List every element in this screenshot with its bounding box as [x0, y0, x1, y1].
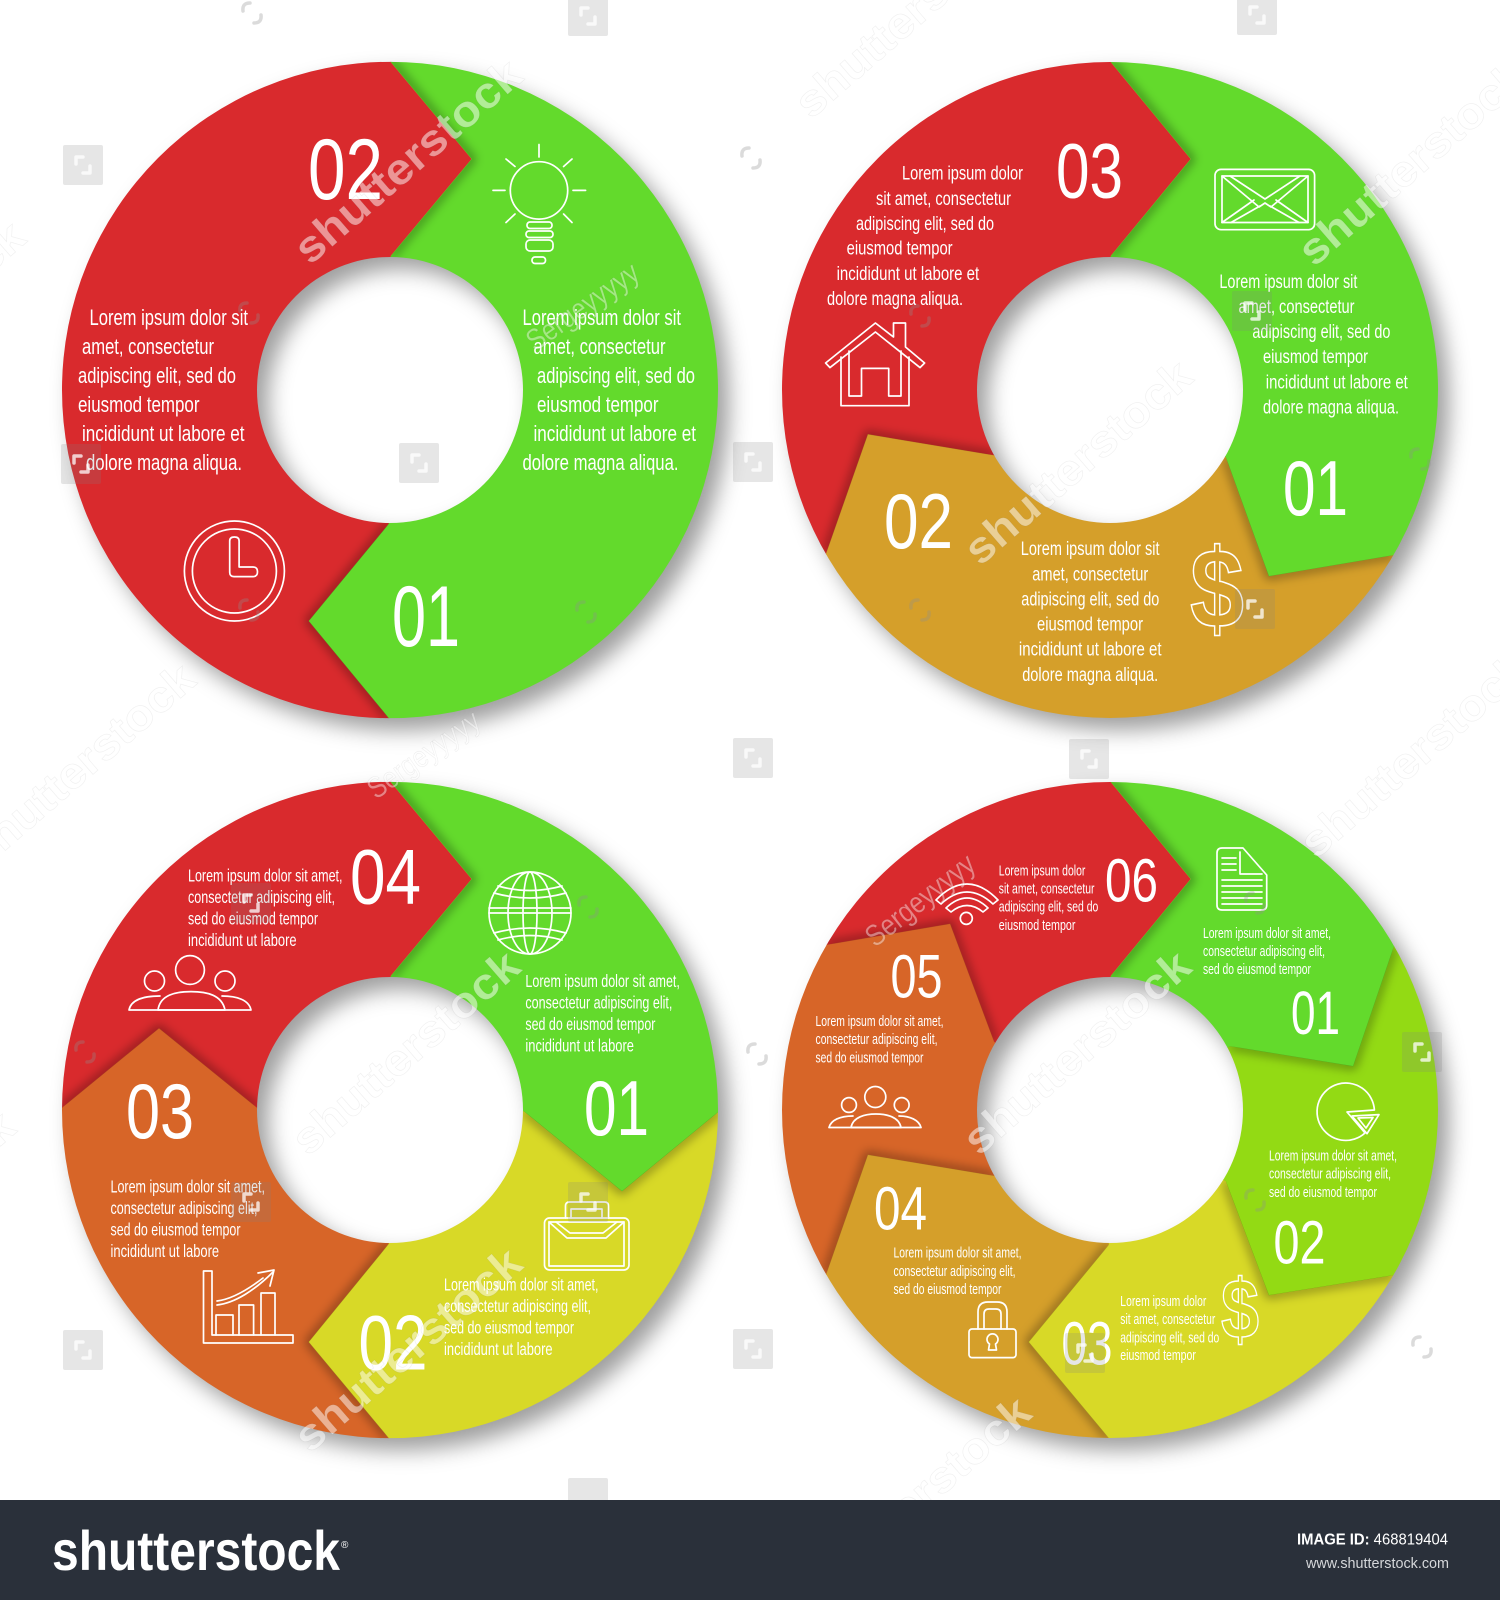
arrow shadow: yellow onto ochre: [1029, 1245, 1109, 1438]
footer logo: shutterstock: shutterstock: [52, 1519, 341, 1582]
donut ring segments: [62, 782, 718, 1438]
panel: four-step donut: [20, 760, 760, 1460]
text block: red: amet, consectetur: [82, 334, 214, 359]
text block: orange: [110, 1177, 265, 1261]
text block: green: eiusmod tempor: [1263, 347, 1369, 368]
text block: green: dolore magna aliqua.: [522, 450, 678, 475]
text block: ochre: Lorem ipsum dolor sit amet,: [894, 1246, 1022, 1262]
text block: ochre: eiusmod tempor: [1037, 615, 1144, 636]
watermark text: shutterstock: shutterstock: [953, 940, 1201, 1165]
text block: ochre: sed do eiusmod tempor: [894, 1282, 1002, 1298]
icon: envelope: [1215, 169, 1315, 230]
text block: ochre: adipiscing elit, sed do: [1021, 589, 1159, 610]
icon: pie chart: [1317, 1083, 1379, 1140]
text block: red: eiusmod tempor: [847, 238, 953, 260]
segment 06 red: [826, 782, 1190, 1043]
watermark square glyphs: [74, 7, 1429, 1361]
text block: red: sit amet, consectetur: [876, 189, 1012, 210]
text block: red: Lorem ipsum dolor sit amet,: [188, 866, 342, 886]
watermark text: shutterstock: shutterstock: [284, 49, 532, 274]
text block: ochre: [894, 1246, 1022, 1298]
text block: yellow: sed do eiusmod tempor: [444, 1318, 574, 1338]
text block: green: adipiscing elit, sed do: [1252, 322, 1390, 343]
number 01: 01: [392, 569, 460, 665]
text block: green: [1203, 926, 1331, 978]
donut ring segments: [782, 782, 1438, 1438]
segment 02 red: [62, 62, 472, 718]
arrow shadow: ochre onto orange: [826, 1155, 994, 1274]
icon: padlock: [969, 1302, 1016, 1358]
text block: yellow: [1120, 1294, 1219, 1364]
donut drop shadow: [73, 74, 729, 730]
arrow shadow: green onto red: [309, 524, 389, 718]
watermark glyph marks: [76, 3, 1431, 1357]
icon: team of three people: [129, 956, 251, 1010]
arrow shadow: red onto green: [391, 782, 472, 976]
donut ring segments: [782, 62, 1438, 718]
number 02: 02: [1274, 1208, 1326, 1276]
segment 01 green: [390, 782, 718, 1192]
segment 02 yellow: [308, 1111, 718, 1438]
text block: lime: consectetur adipiscing elit,: [1269, 1167, 1391, 1183]
text block: green: Lorem ipsum dolor sit amet,: [525, 971, 680, 991]
donut drop shadow: [793, 74, 1449, 730]
arrow shadow: green onto lime: [1230, 947, 1394, 1066]
icon: dollar sign: $: [1190, 526, 1244, 651]
text block: red: eiusmod tempor: [999, 918, 1076, 934]
text block: red: incididunt ut labore et: [837, 264, 980, 285]
text block: ochre: consectetur adipiscing elit,: [894, 1264, 1016, 1280]
text block: green: eiusmod tempor: [537, 392, 658, 417]
icon: document: [1217, 848, 1267, 910]
text block: orange: consectetur adipiscing elit,: [816, 1032, 938, 1048]
text block: red: eiusmod tempor: [78, 392, 200, 417]
panel: six-step donut: [760, 760, 1480, 1470]
text block: red: [999, 863, 1098, 934]
segment 02 ochre: [826, 434, 1394, 718]
text block: orange: Lorem ipsum dolor sit amet,: [816, 1014, 944, 1030]
text block: red: [78, 305, 248, 475]
text block: red: consectetur adipiscing elit,: [188, 887, 335, 907]
text block: green: Lorem ipsum dolor sit: [522, 305, 681, 330]
arrow shadow: green onto ochre: [1226, 457, 1394, 576]
text block: red: incididunt ut labore et: [82, 421, 244, 446]
segment 04 red: [62, 782, 472, 1108]
text block: orange: [816, 1014, 944, 1066]
text block: green: consectetur adipiscing elit,: [525, 992, 672, 1012]
text block: green: sed do eiusmod tempor: [525, 1014, 656, 1034]
arrow shadow: red onto green: [1111, 782, 1191, 976]
number 01: 01: [1283, 444, 1348, 532]
arrow shadow: ochre onto red: [826, 434, 994, 553]
footer registered mark: ®: [341, 1540, 349, 1551]
panel: two-step donut: [40, 40, 740, 740]
segment 05 orange: [782, 924, 996, 1275]
text block: lime: [1269, 1148, 1397, 1201]
arrow shadow: orange onto red: [826, 924, 994, 1042]
text block: red: adipiscing elit, sed do: [999, 900, 1098, 916]
footer image id: IMAGE ID: 468819404: [1297, 1532, 1448, 1548]
text block: green: dolore magna aliqua.: [1263, 398, 1399, 418]
number 02: 02: [308, 122, 383, 218]
number 01: 01: [1291, 979, 1340, 1047]
text block: lime: Lorem ipsum dolor sit amet,: [1269, 1148, 1397, 1164]
text block: orange: consectetur adipiscing elit,: [110, 1198, 258, 1218]
footer website: www.shutterstock.com: [1305, 1555, 1449, 1572]
text block: red: Lorem ipsum dolor: [999, 863, 1086, 879]
icon: growth chart: [204, 1270, 293, 1343]
text block: orange: sed do eiusmod tempor: [110, 1220, 241, 1240]
text block: ochre: amet, consectetur: [1032, 564, 1149, 585]
watermark text: Sergeyyyyy: [361, 256, 982, 954]
text block: lime: sed do eiusmod tempor: [1269, 1185, 1377, 1201]
number 02: 02: [358, 1298, 428, 1386]
icon: light bulb: [493, 144, 586, 264]
text block: green: consectetur adipiscing elit,: [1203, 944, 1325, 960]
arrow shadow: orange onto red: [62, 1028, 257, 1108]
segment 02 lime: [1223, 946, 1438, 1296]
text block: green: incididunt ut labore: [525, 1035, 634, 1055]
icon: briefcase: [544, 1202, 629, 1270]
text block: yellow: sit amet, consectetur: [1120, 1312, 1215, 1328]
text block: ochre: [1019, 539, 1162, 686]
segment 03 orange: [62, 1028, 390, 1438]
segment 01 green: [1110, 782, 1394, 1066]
text block: green: [525, 971, 680, 1055]
watermark text: shutterstock: shutterstock: [282, 940, 530, 1165]
text block: yellow: [444, 1275, 598, 1359]
text block: orange: Lorem ipsum dolor sit amet,: [110, 1177, 265, 1197]
text block: red: dolore magna aliqua.: [827, 289, 963, 310]
number 03: 03: [126, 1067, 194, 1155]
text block: green: incididunt ut labore et: [1266, 372, 1408, 394]
text block: red: dolore magna aliqua.: [86, 450, 242, 475]
number 03: 03: [1056, 126, 1123, 214]
text block: yellow: incididunt ut labore: [444, 1339, 553, 1359]
text block: yellow: adipiscing elit, sed do: [1120, 1330, 1219, 1346]
text block: green: Lorem ipsum dolor sit amet,: [1203, 926, 1331, 942]
segment 04 ochre: [826, 1154, 1109, 1438]
text block: ochre: incididunt ut labore et: [1019, 640, 1162, 660]
donut drop shadow: [73, 794, 729, 1450]
text block: yellow: eiusmod tempor: [1120, 1348, 1196, 1364]
text block: green: adipiscing elit, sed do: [537, 363, 695, 388]
icon: clock: [184, 521, 284, 621]
footer background: [0, 1500, 1500, 1600]
arrow shadow: yellow onto orange: [309, 1244, 389, 1438]
text block: green: [522, 305, 696, 475]
number 04: 04: [350, 832, 421, 920]
text block: yellow: Lorem ipsum dolor: [1120, 1294, 1206, 1310]
number 04: 04: [874, 1174, 927, 1242]
number 01: 01: [584, 1064, 649, 1152]
segment 01 green: [1110, 62, 1438, 576]
watermark text: Sergeyyyyy: Sergeyyyyy: [361, 704, 487, 806]
watermark text: shutterstock: shutterstock: [954, 350, 1202, 575]
text block: green: sed do eiusmod tempor: [1203, 962, 1311, 978]
number 06: 06: [1105, 846, 1158, 914]
watermark text: shutterstock: shutterstock: [284, 1237, 532, 1462]
donut drop shadow: [793, 794, 1449, 1450]
arrow shadow: red onto green: [391, 62, 472, 256]
text block: red: [188, 866, 342, 950]
watermark text: Sergeyyyyy: Sergeyyyyy: [520, 256, 646, 358]
icon: house: [826, 323, 925, 406]
text block: green: amet, consectetur: [534, 334, 666, 359]
arrow shadow: lime onto yellow: [1226, 1181, 1394, 1295]
number 03: 03: [1062, 1310, 1112, 1378]
icon: dollar sign: $: [1221, 1262, 1259, 1356]
text block: red: adipiscing elit, sed do: [856, 214, 994, 235]
text block: orange: incididunt ut labore: [110, 1241, 219, 1261]
donut ring segments: [62, 62, 718, 718]
text block: ochre: dolore magna aliqua.: [1022, 665, 1158, 686]
text block: yellow: Lorem ipsum dolor sit amet,: [444, 1275, 598, 1295]
text block: red: sit amet, consectetur: [999, 882, 1095, 898]
panel: three-step donut: [760, 40, 1480, 750]
segment 01 green: [308, 62, 718, 718]
text block: orange: sed do eiusmod tempor: [816, 1050, 924, 1066]
arrow shadow: red onto green: [1111, 62, 1191, 256]
text block: red: [827, 164, 1024, 310]
segment 03 red: [782, 62, 1190, 554]
segment 03 yellow: [1028, 1180, 1394, 1438]
text block: green: Lorem ipsum dolor sit: [1219, 272, 1358, 293]
text block: red: incididunt ut labore: [188, 930, 297, 950]
text block: ochre: Lorem ipsum dolor sit: [1021, 539, 1160, 560]
text block: red: sed do eiusmod tempor: [188, 909, 318, 929]
icon: wifi signal: [936, 884, 998, 924]
arrow shadow: green onto yellow: [524, 1111, 719, 1191]
text block: green: [1219, 272, 1408, 418]
watermark text: Sergeyyyyy: Sergeyyyyy: [859, 847, 982, 954]
number 02: 02: [884, 477, 953, 565]
icon: team of three people: [829, 1086, 921, 1128]
text block: yellow: consectetur adipiscing elit,: [444, 1296, 591, 1316]
text block: green: incididunt ut labore et: [534, 421, 696, 446]
text block: red: Lorem ipsum dolor: [902, 164, 1024, 184]
footer bar: [0, 1500, 1500, 1600]
number 05: 05: [890, 942, 942, 1010]
text block: red: adipiscing elit, sed do: [78, 363, 236, 388]
icon: globe: [489, 872, 571, 954]
text block: red: Lorem ipsum dolor sit: [90, 305, 248, 330]
text block: green: amet, consectetur: [1238, 297, 1355, 318]
